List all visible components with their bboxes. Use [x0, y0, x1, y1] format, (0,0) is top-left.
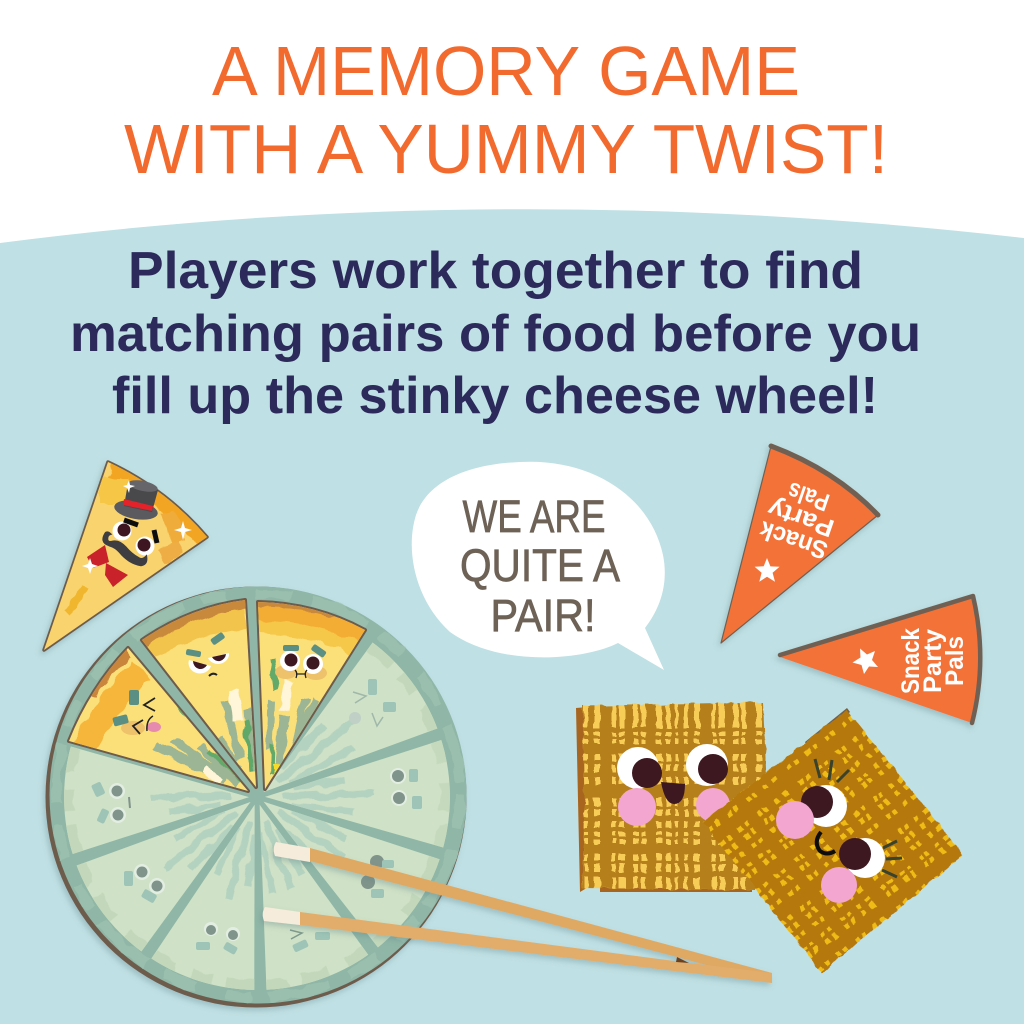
- title: WITH A YUMMY TWIST!: [124, 110, 888, 188]
- card logo: [897, 628, 969, 694]
- card logo: Party: [919, 629, 947, 693]
- speech bubble text: PAIR!: [490, 590, 596, 641]
- speech bubble text: WE ARE: [462, 491, 606, 542]
- cheese wheel board: [46, 586, 466, 1008]
- intro text: [70, 242, 921, 425]
- face: [776, 759, 902, 903]
- lower tong arm: [263, 907, 772, 983]
- upper tong arm: [274, 842, 772, 983]
- card logo: [756, 472, 846, 564]
- icon: star: [755, 558, 780, 582]
- cracker left: [576, 702, 767, 892]
- orange card back 2: [780, 596, 980, 723]
- card logo: Party: [764, 494, 838, 542]
- speech bubble: [412, 462, 665, 670]
- title: [124, 32, 888, 188]
- card logo: Snack: [756, 515, 831, 564]
- speech bubble text: [460, 491, 620, 641]
- icon: top hat: [113, 478, 159, 523]
- cheese slice: silly face: [69, 648, 248, 791]
- icon: bow tie: [87, 545, 128, 587]
- face: [617, 744, 730, 826]
- card logo: Pals: [941, 636, 969, 686]
- faded slices: [63, 638, 451, 997]
- cracker right: [703, 708, 963, 973]
- intro text: fill up the stinky cheese wheel!: [112, 367, 878, 425]
- orange card back 1: [721, 446, 878, 643]
- card logo: Pals: [784, 476, 833, 516]
- icon: eyes and brows: [112, 520, 157, 556]
- cheese slice: grumpy face: [142, 600, 256, 787]
- tongs: [263, 842, 772, 983]
- speech bubble text: QUITE A: [460, 540, 620, 591]
- intro text: matching pairs of food before you: [70, 305, 921, 363]
- cheese slice: worried face: [258, 602, 365, 789]
- icon: sparkles: [82, 480, 192, 574]
- fancy pizza slice: [44, 462, 207, 650]
- intro text: Players work together to find: [128, 242, 863, 300]
- icon: star: [852, 648, 878, 674]
- background panel: [0, 209, 1024, 1024]
- card logo: Snack: [897, 628, 925, 694]
- icon: moustache: [104, 533, 146, 565]
- faded faces: [91, 679, 422, 955]
- title: A MEMORY GAME: [212, 32, 800, 110]
